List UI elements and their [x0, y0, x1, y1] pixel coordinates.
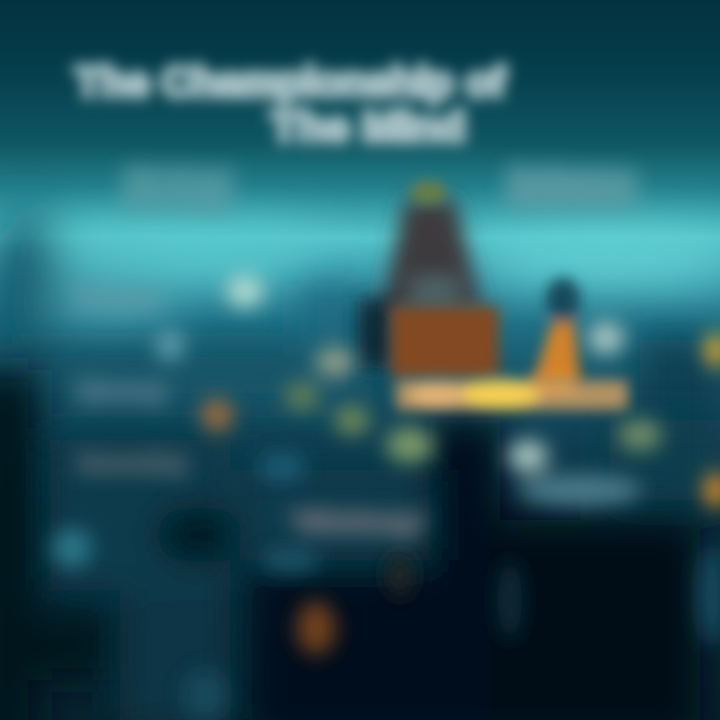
left column labels: Memory	[80, 381, 166, 403]
right column heading: Endurance	[510, 187, 634, 209]
golden base	[396, 378, 628, 410]
blue accent patches	[52, 440, 720, 720]
brown castle body	[390, 306, 498, 376]
distant city	[0, 285, 720, 470]
right column heading	[510, 167, 634, 209]
dark tower silhouette	[358, 200, 482, 368]
left column labels: Focus	[78, 288, 158, 310]
glow band	[0, 210, 720, 390]
title	[75, 58, 506, 150]
center lower label: Victory	[296, 509, 421, 536]
right column heading: Endurance	[510, 167, 634, 189]
title: The Mind	[270, 103, 466, 150]
left column heading: Strategy	[126, 189, 232, 211]
small orange tower	[532, 278, 580, 384]
tower cap	[410, 181, 446, 203]
left column labels	[78, 288, 185, 475]
dark foreground city	[0, 370, 720, 720]
castle tower	[358, 181, 628, 410]
left column heading	[126, 167, 232, 211]
lights and highlights	[156, 275, 720, 655]
left column labels: Reasoning	[80, 453, 185, 475]
left column heading: Strategy	[126, 167, 232, 189]
title: The Championship of	[75, 58, 506, 105]
